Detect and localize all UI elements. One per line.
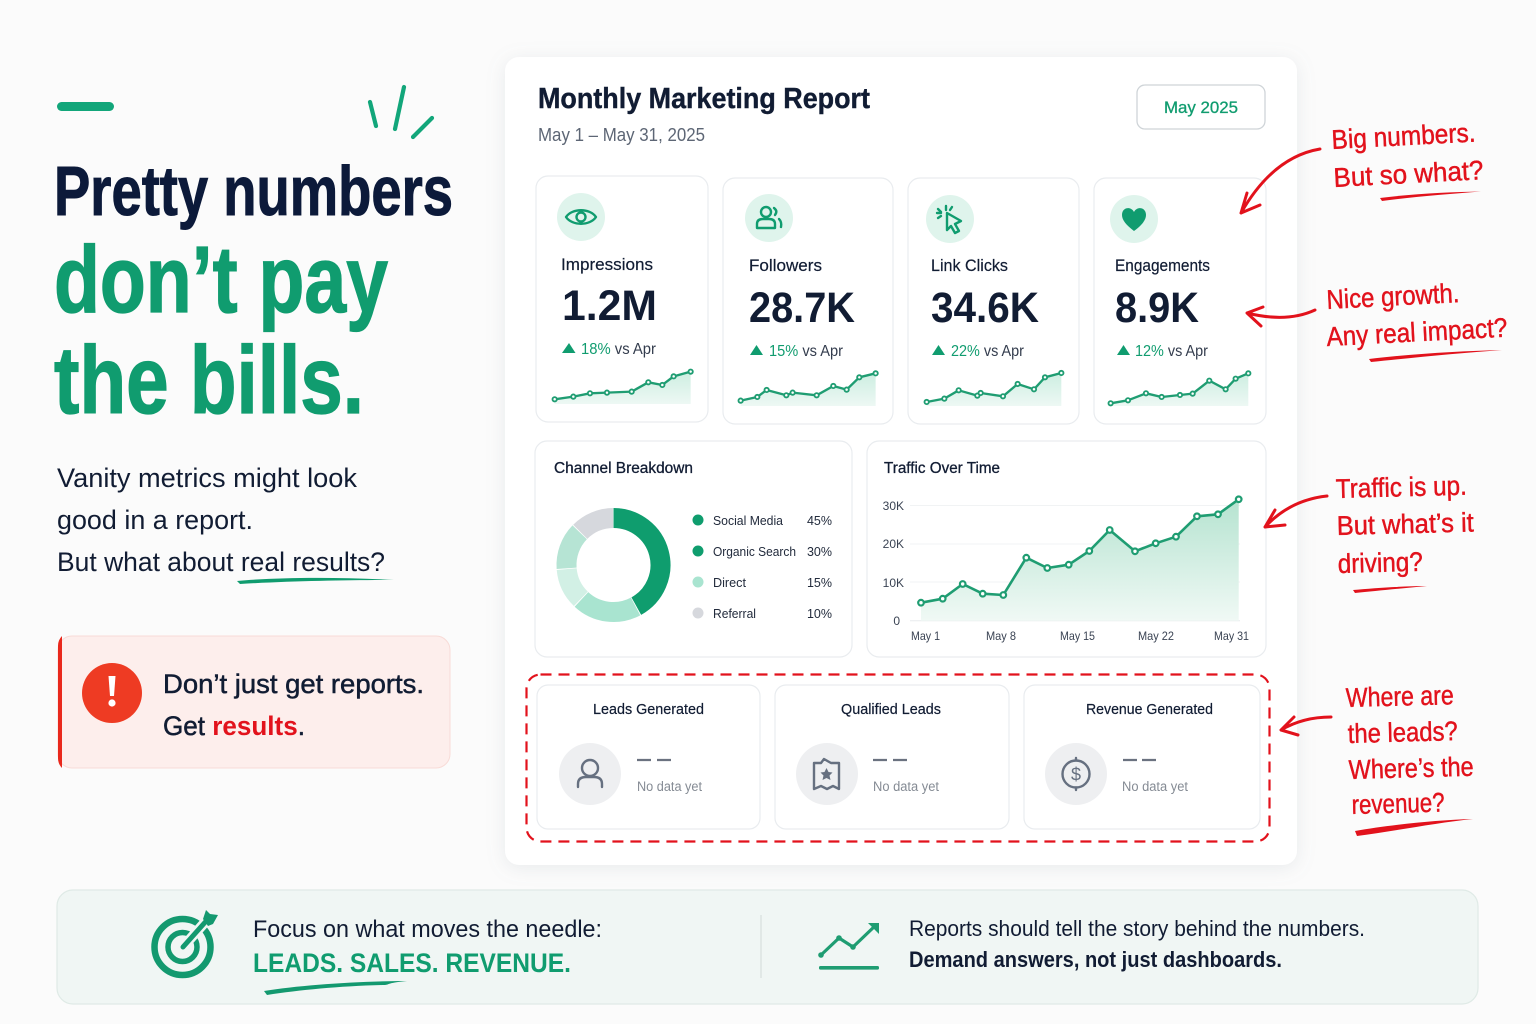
dashed highlight around missing metrics <box>526 674 1270 842</box>
x axis labels: May 31 <box>1214 629 1249 643</box>
x axis labels: May 15 <box>1060 629 1095 643</box>
panel: impressions: 1.2M <box>562 282 657 330</box>
legend: Referral <box>713 607 756 621</box>
callout text: Get results. <box>163 711 305 741</box>
annotation: leads and revenue: the leads? <box>1347 716 1458 749</box>
x axis labels: May 1 <box>911 629 940 643</box>
panel: traffic over time: Traffic Over Time <box>884 460 1000 477</box>
icon: warning <box>82 663 142 723</box>
intro paragraph: good in a report. <box>57 505 253 535</box>
month badge <box>1137 85 1265 129</box>
icon: badge <box>796 743 858 805</box>
green underline <box>237 578 394 584</box>
annotation: traffic: driving? <box>1337 547 1423 579</box>
title line 3: the bills. <box>54 327 364 434</box>
legend: Social Media <box>713 514 783 528</box>
x axis labels <box>911 629 1249 643</box>
title line 1: Pretty numbers <box>54 152 453 230</box>
x axis labels: May 22 <box>1138 629 1174 643</box>
icon: heart <box>1110 195 1158 243</box>
panel: revenue generated: Revenue Generated <box>1086 701 1213 718</box>
annotation: big numbers: But so what? <box>1333 155 1484 193</box>
panel: revenue generated <box>1024 685 1260 829</box>
annotation: leads and revenue: Where are <box>1345 680 1454 713</box>
title line 2: don’t pay <box>54 227 388 333</box>
empty value <box>1122 760 1188 794</box>
icon: people <box>745 194 793 242</box>
legend: Organic Search <box>713 545 796 559</box>
callout text: Don’t just get reports. <box>163 669 424 699</box>
panel: qualified leads <box>775 685 1009 829</box>
annotation: nice growth <box>1247 276 1508 362</box>
left column headline block <box>54 87 453 434</box>
annotation: leads and revenue: revenue? <box>1351 787 1445 820</box>
panel: channel breakdown: Channel Breakdown <box>554 460 693 477</box>
donut chart <box>566 518 661 612</box>
legend: 15% <box>807 576 832 590</box>
annotation: nice growth: Nice growth. <box>1326 278 1460 315</box>
sparkline <box>1108 371 1250 406</box>
annotation: big numbers: Big numbers. <box>1331 117 1476 155</box>
panel: traffic over time <box>867 441 1266 657</box>
empty value: No data yet <box>637 779 702 794</box>
panel: followers <box>723 178 893 424</box>
legend <box>692 514 832 621</box>
sparkline <box>738 371 878 406</box>
panel: engagements <box>1094 178 1266 424</box>
y axis labels: 30K <box>883 499 904 513</box>
panel: link clicks: Link Clicks <box>931 256 1008 275</box>
callout text <box>163 669 424 741</box>
annotation: leads and revenue <box>1281 680 1475 836</box>
panel: followers: Followers <box>749 256 822 275</box>
panel: link clicks: 34.6K <box>931 284 1039 332</box>
delta: 22% vs Apr <box>951 343 1024 360</box>
panel: engagements: 8.9K <box>1115 284 1199 332</box>
annotation: traffic: But what’s it <box>1336 507 1475 541</box>
alert callout <box>58 636 450 768</box>
legend: 10% <box>807 607 832 621</box>
empty value: No data yet <box>1122 779 1188 794</box>
panel: bottom takeaway bar <box>57 890 1478 1004</box>
month badge: May 2025 <box>1164 99 1238 117</box>
focus text: LEADS. SALES. REVENUE. <box>253 948 571 978</box>
focus text <box>253 916 602 995</box>
report title: Monthly Marketing Report <box>538 83 870 115</box>
decorative spark marks <box>370 87 432 137</box>
empty value: No data yet <box>873 779 939 794</box>
panel: impressions: Impressions <box>561 255 653 274</box>
x axis labels: May 8 <box>986 629 1016 643</box>
intro paragraph: Vanity metrics might look <box>57 463 357 493</box>
reports text <box>909 916 1365 972</box>
icon: dollar coin <box>1045 743 1107 805</box>
icon: eye <box>557 193 605 241</box>
annotation: leads and revenue: Where’s the <box>1348 752 1474 785</box>
y axis labels: 20K <box>883 537 904 551</box>
intro paragraph: But what about real results? <box>57 547 385 577</box>
delta: 18% vs Apr <box>581 341 656 358</box>
icon: target <box>154 910 218 975</box>
delta: 12% vs Apr <box>1135 343 1208 360</box>
legend: Direct <box>713 576 747 590</box>
intro paragraph <box>57 463 394 584</box>
y axis labels: 0 <box>893 614 900 628</box>
reports text: Reports should tell the story behind the numbers. <box>909 916 1365 941</box>
annotation: big numbers <box>1241 117 1484 213</box>
panel: dashboard report <box>505 57 1297 865</box>
line chart <box>918 496 1241 621</box>
delta: 15% vs Apr <box>769 343 843 360</box>
panel: leads generated <box>537 685 760 829</box>
panel: engagements: Engagements <box>1115 256 1210 275</box>
icon: dollar coin: $ <box>1071 764 1081 784</box>
sparkline <box>552 369 693 404</box>
panel: qualified leads: Qualified Leads <box>841 701 941 718</box>
y axis labels: 10K <box>883 576 904 590</box>
report date range: May 1 – May 31, 2025 <box>538 125 705 145</box>
icon: cursor <box>926 195 974 243</box>
y axis labels <box>883 499 904 628</box>
legend: 30% <box>807 545 832 559</box>
panel: followers: 28.7K <box>749 284 855 332</box>
panel: impressions <box>536 176 708 422</box>
accent bar <box>57 102 114 111</box>
focus text: Focus on what moves the needle: <box>253 916 602 943</box>
empty value <box>873 760 939 794</box>
annotation: traffic: Traffic is up. <box>1335 471 1467 504</box>
legend: 45% <box>807 514 832 528</box>
annotation: nice growth: Any real impact? <box>1326 313 1508 352</box>
panel: link clicks <box>908 178 1079 424</box>
sparkline <box>924 371 1063 406</box>
panel: channel breakdown <box>535 441 852 657</box>
annotation: traffic <box>1265 470 1476 593</box>
icon: trend arrow <box>818 923 879 970</box>
panel: leads generated: Leads Generated <box>593 701 704 718</box>
reports text: Demand answers, not just dashboards. <box>909 947 1282 972</box>
icon: person <box>559 743 621 805</box>
empty value <box>637 760 702 794</box>
